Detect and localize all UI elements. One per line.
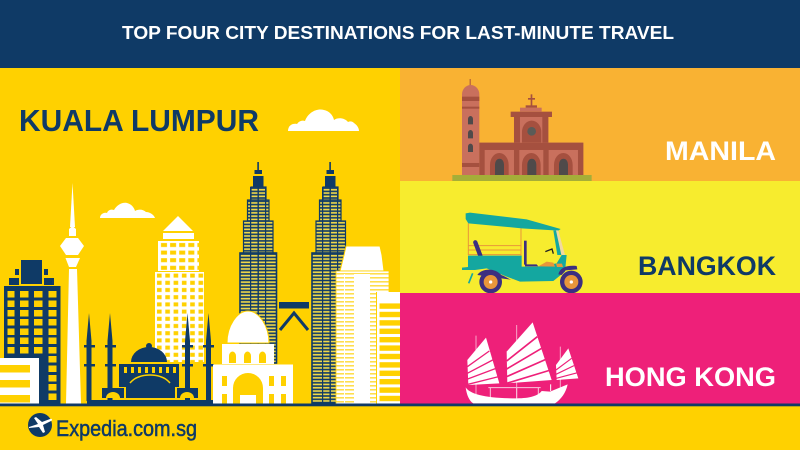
landmark: Petronas tower right [312,162,348,403]
minarets [84,313,214,401]
landmark: dark office tower [4,260,60,404]
landmark: KL Tower [60,183,84,404]
icon: Expedia globe with plane [28,413,52,437]
landmark: mosque [84,313,214,405]
label: Bangkok: BANGKOK [638,251,776,281]
heading: Kuala Lumpur: KUALA LUMPUR [19,103,259,138]
header banner [0,0,800,68]
landmark: low white building with stripes [0,358,39,404]
label: Manila: MANILA [665,136,776,166]
logo: Expedia.com.sg [28,413,197,441]
landmark: white tower block [336,246,400,404]
panel: Hong Kong [400,293,800,404]
landmark: Petronas tower left [240,162,276,363]
landmark: Petronas skybridge [279,302,309,330]
icon: Manila cathedral [452,79,592,181]
panel: Kuala Lumpur [0,103,400,405]
icon: tuk-tuk [462,213,583,293]
icon: small cloud [100,203,155,218]
ground line [0,404,800,406]
panel: Bangkok [400,181,800,293]
landmark: domed white building [213,311,293,404]
panel: Manila [400,68,800,181]
landmark: white high-rise [155,216,204,362]
icon: large cloud [288,110,359,131]
title: TOP FOUR CITY DESTINATIONS FOR LAST-MINUTE TRAVEL [122,22,674,43]
wordmark: Expedia.com.sg [56,416,197,441]
icon: junk boat [466,322,578,403]
label: Hong Kong: HONG KONG [605,362,776,392]
